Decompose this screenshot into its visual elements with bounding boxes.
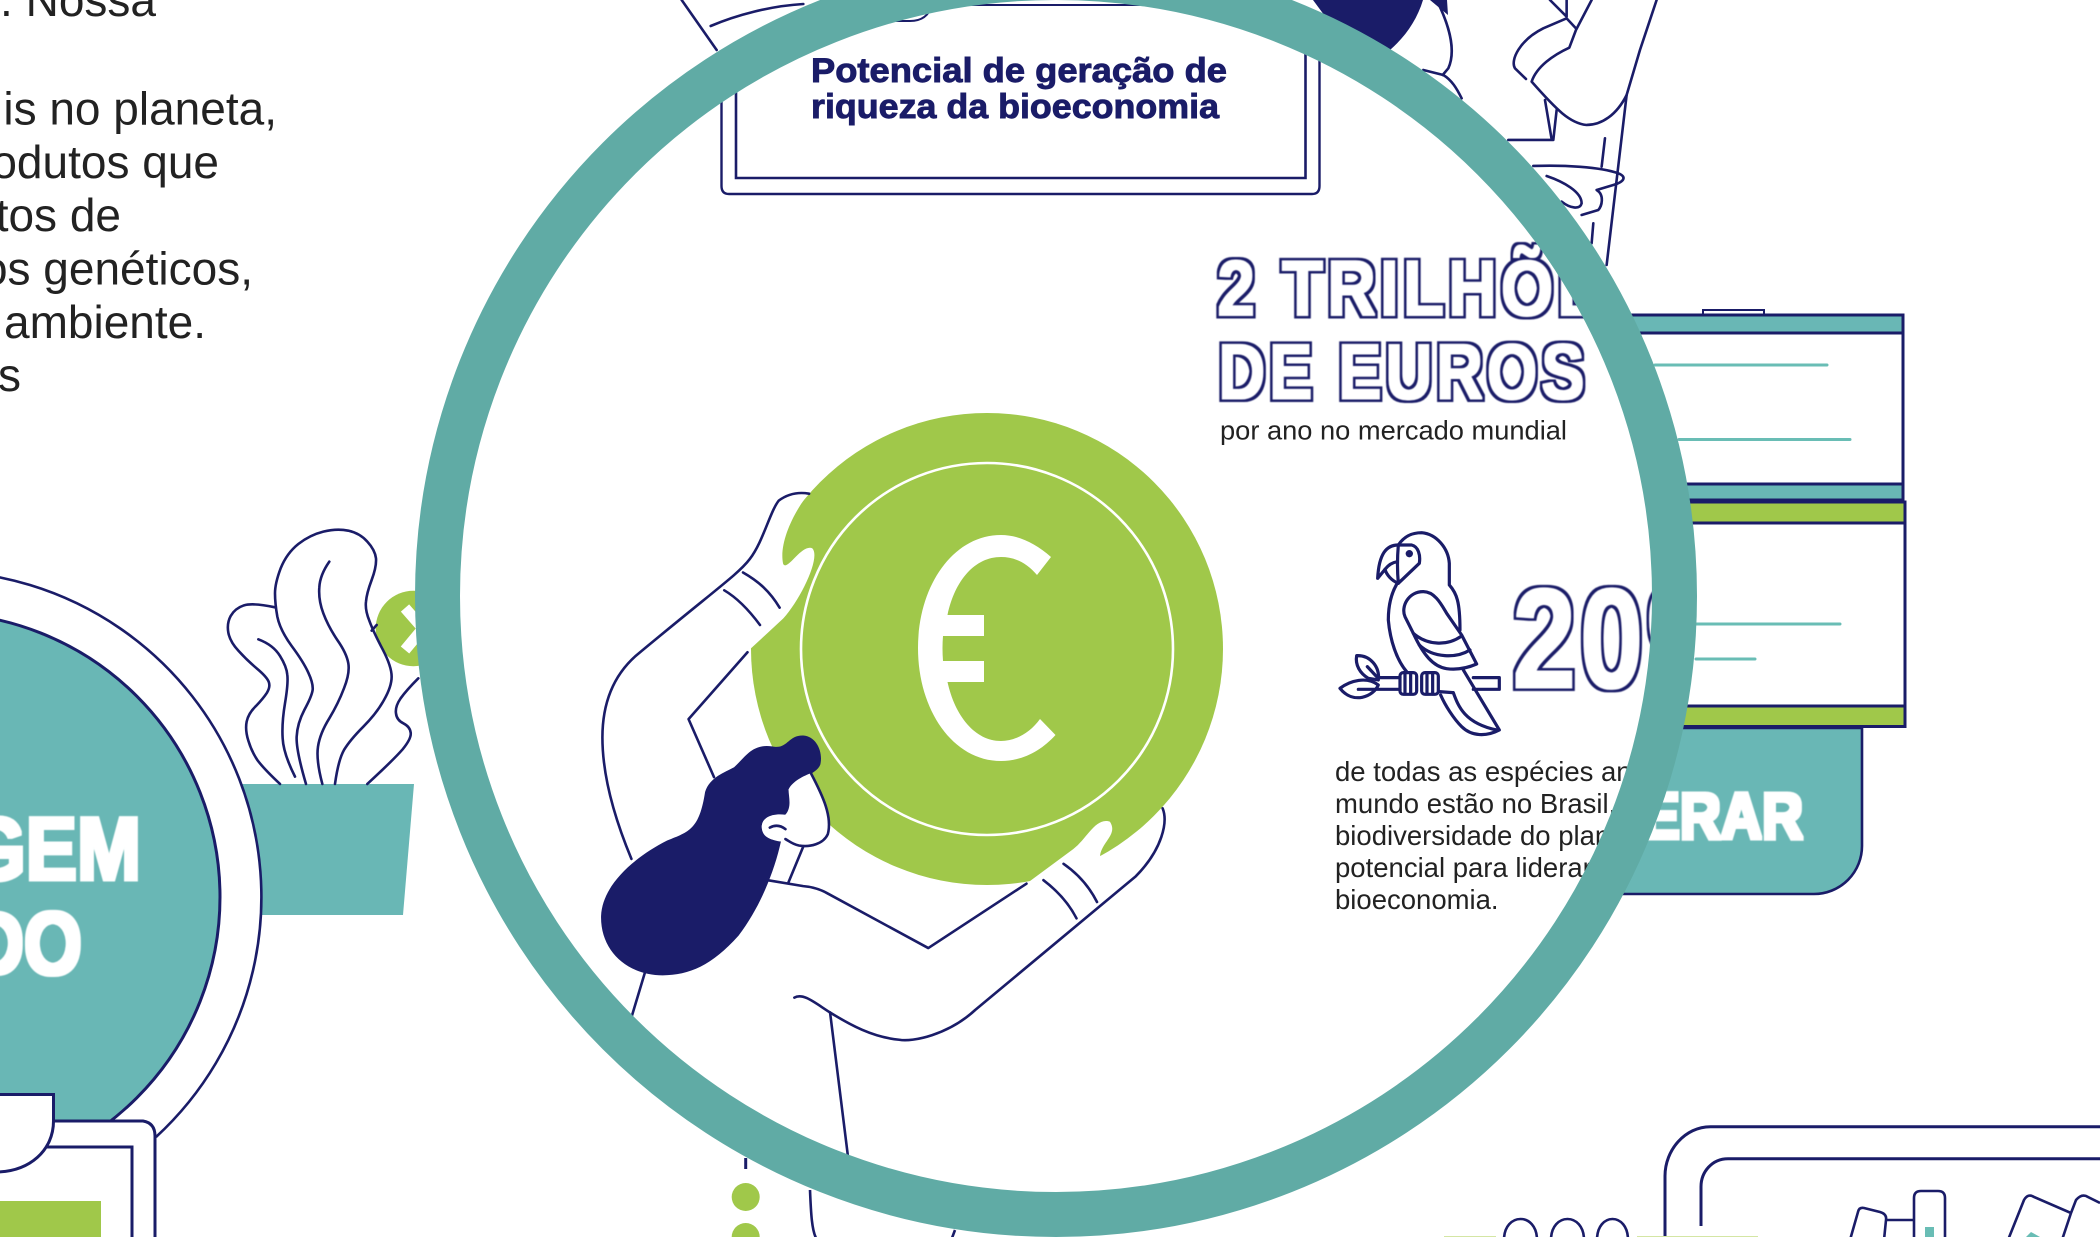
- stat: 2 trilhoes de euros: [1216, 241, 1586, 445]
- panel bottom right: [1444, 1127, 2100, 1237]
- top figure line art outside lens: [1423, 0, 1657, 265]
- mini bar chart: [1850, 1191, 1945, 1237]
- dashed connector with green dots: [732, 1158, 760, 1237]
- coin: [751, 413, 1223, 885]
- stat: 2 trilhoes de euros: por ano no mercado mundial: [1220, 416, 1567, 446]
- book stack: teal book: [1550, 310, 1903, 500]
- paragraph: biodiversidade do planeta: [1335, 820, 1649, 851]
- strips and keys: [1444, 1236, 1496, 1237]
- paragraph: [1336, 760, 1628, 910]
- hair: [601, 735, 821, 975]
- hands over coin: [739, 493, 1112, 896]
- heading text: riqueza da bioeconomia: [811, 88, 1220, 126]
- lower figure lines: [810, 1190, 955, 1237]
- paragraph: de todas as espécies animais do: [1335, 756, 1734, 787]
- paragraph: potencial para liderar: [1335, 852, 1592, 883]
- heading frame: [722, 0, 1320, 194]
- stat: 2 trilhoes de euros: DE EUROS: [1218, 328, 1588, 416]
- tab: [0, 1094, 54, 1172]
- mini folders: [2008, 1196, 2100, 1237]
- stat: 2 trilhoes de euros: 2 TRILHÕES: [1218, 244, 1656, 332]
- green close icon: [376, 591, 451, 666]
- icon: parrot: [1340, 533, 1499, 735]
- background text block: [0, 0, 277, 401]
- paragraph: mundo estão no Brasil. A: [1335, 788, 1641, 819]
- plant leaves: [228, 530, 418, 784]
- background text block: ambiente.: [4, 296, 206, 348]
- woman holding coin: [601, 493, 1165, 1156]
- body outlines: [602, 493, 1165, 1156]
- button: ERAR: [1642, 778, 1803, 852]
- green block: [0, 1201, 101, 1237]
- top left figure line art: [682, 0, 803, 50]
- icon: euro sign: [918, 535, 1056, 761]
- heading text: Potencial de geração de: [811, 52, 1227, 90]
- background text block: is no planeta,: [3, 82, 277, 134]
- heading text: [811, 52, 1227, 126]
- stat: 20 percent: 20%: [1512, 560, 1752, 718]
- laptop frame bottom left: [0, 1094, 155, 1237]
- lens content: [601, 0, 1752, 1156]
- button: [1500, 728, 1862, 894]
- left circle badge: [0, 571, 262, 1223]
- lens ring: [438, 0, 1674, 1214]
- plant pot: [235, 784, 414, 915]
- face: [762, 773, 829, 846]
- navy hair outside lens: [1313, 0, 1448, 50]
- paragraph: bioeconomia.: [1335, 884, 1499, 915]
- book stack: green book: [1550, 502, 1905, 726]
- lens white disc: [459, 0, 1653, 1193]
